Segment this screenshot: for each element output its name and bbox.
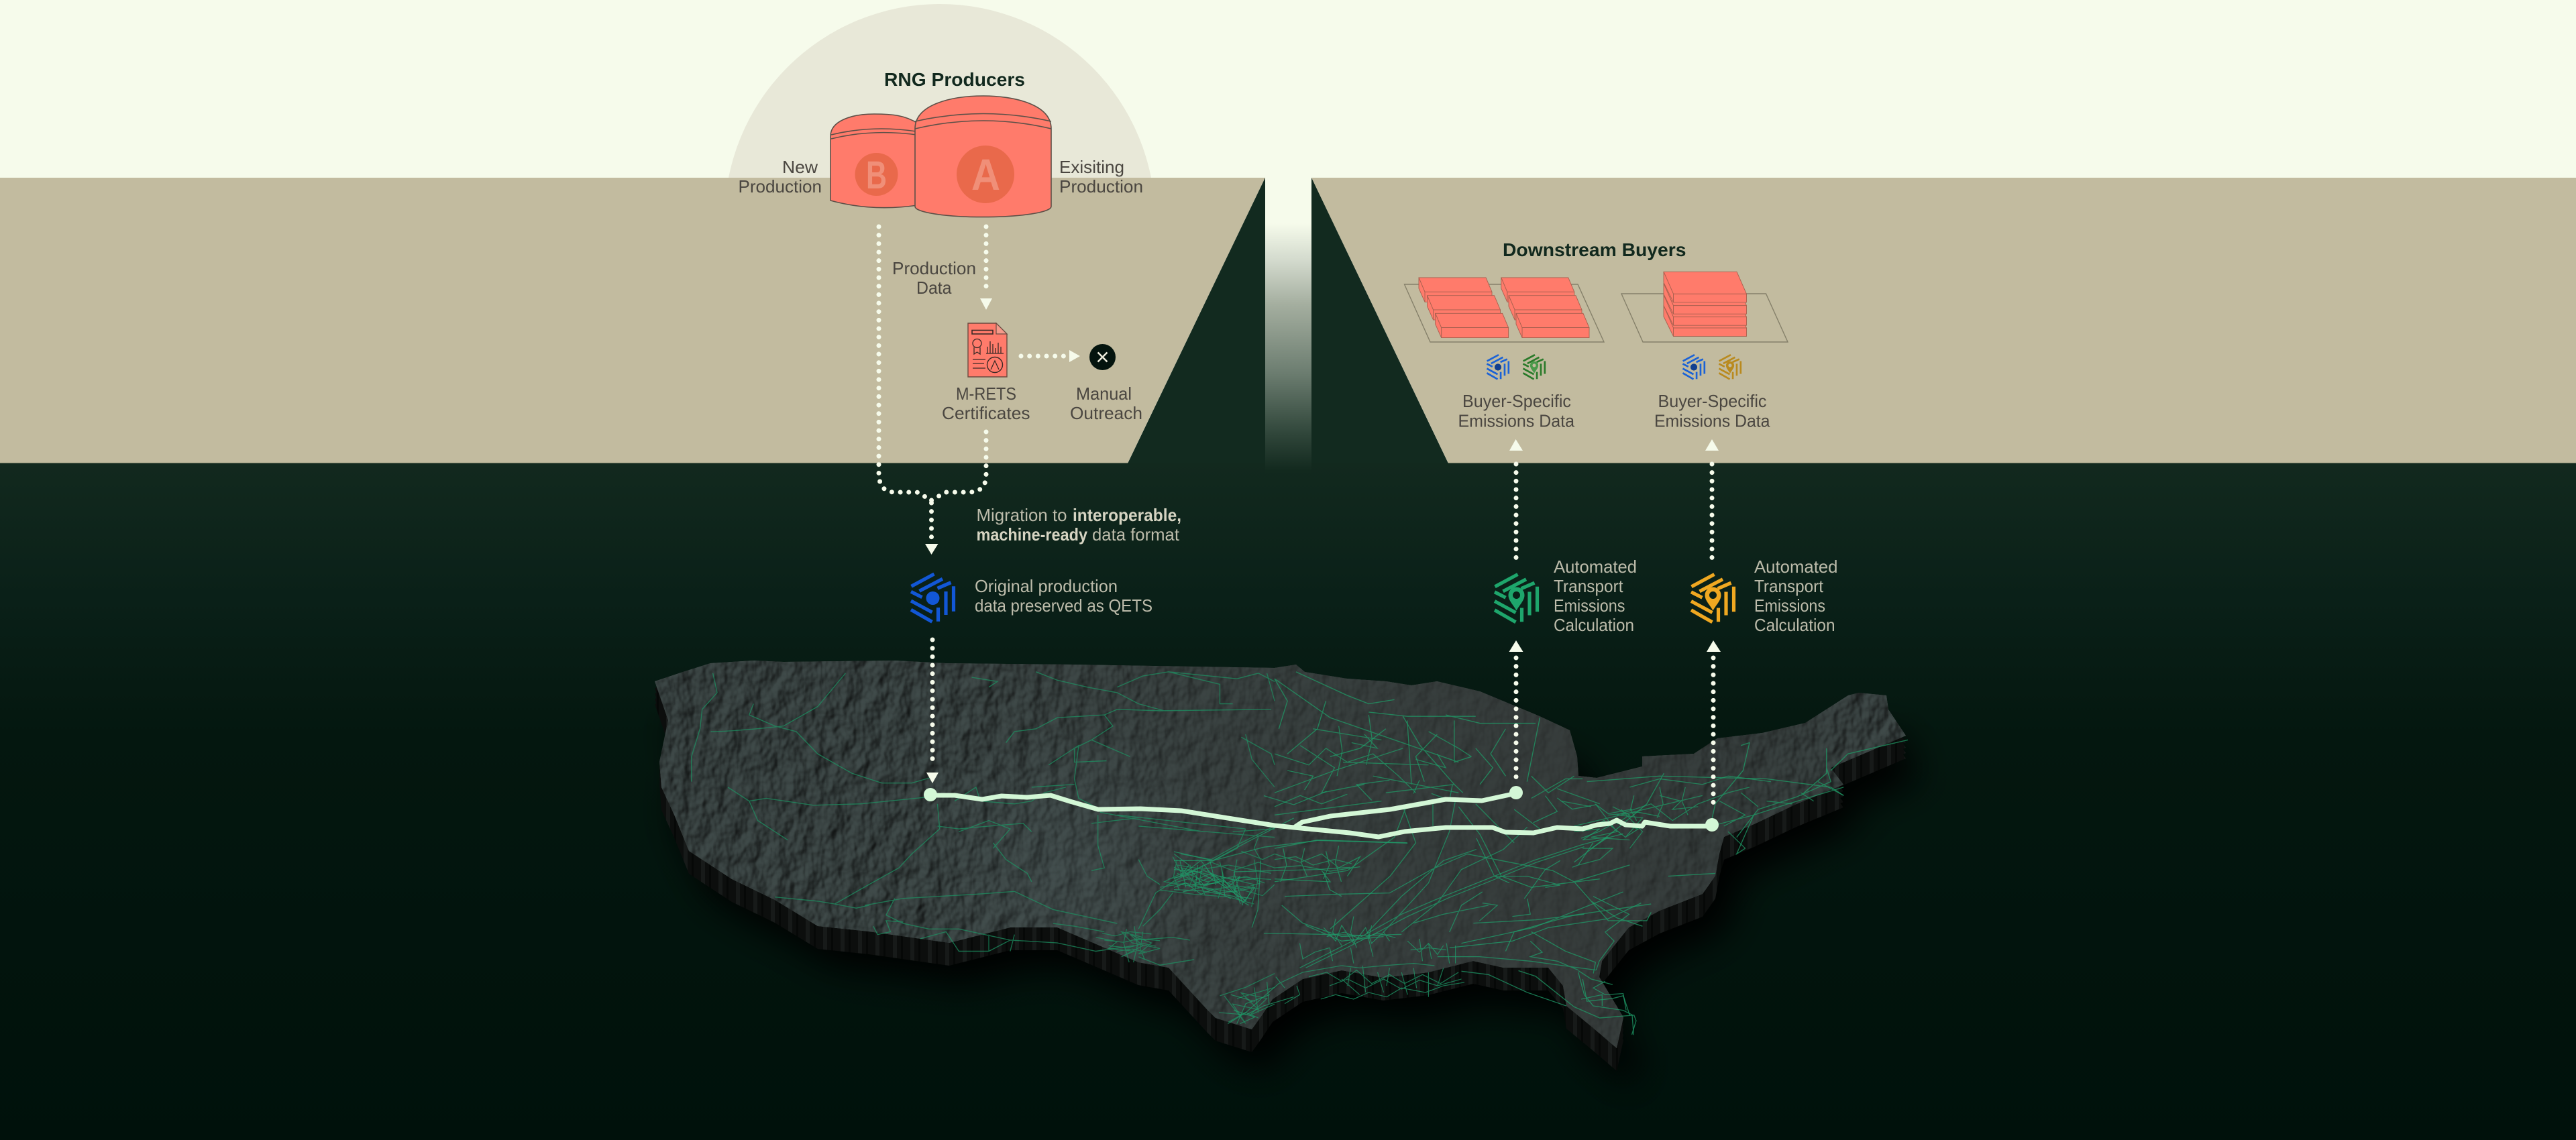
text: migration note (977, 505, 1181, 545)
pipeline cluster: Arkansas-Louisiana hub (1299, 917, 1456, 964)
heading: Downstream Buyers: Downstream Buyers (1503, 239, 1686, 260)
label: New Production (738, 157, 822, 196)
text: migration note: machine-ready (977, 524, 1087, 545)
icon: tank B new production: B (866, 154, 887, 197)
panel: right tan band (1311, 178, 2576, 463)
label: Buyer-Specific Emissions Data, left: Buyer-Specific (1462, 391, 1571, 411)
label: Existing Production: Production (1059, 176, 1143, 196)
label: M-RETS Certificates (942, 384, 1030, 423)
label: Production Data: Data (916, 278, 952, 298)
background: sky (0, 0, 2576, 469)
panel: left tan band (0, 178, 1265, 463)
arrow: pipeline node up to green cube (1509, 640, 1523, 779)
label: Buyer-Specific Emissions Data, right: Emissions Data (1654, 410, 1770, 431)
route line: shared trunk and lower branch (930, 795, 1712, 837)
buyer one: platform and building blocks (1405, 278, 1604, 342)
text: automated calculation, green (1554, 557, 1637, 635)
label: Production Data: Production (892, 258, 976, 278)
buyer two: platform and stacked blocks (1621, 272, 1788, 342)
arrow: migration to QETS (925, 503, 938, 555)
text: QETS note: Original production (975, 576, 1118, 596)
label: Existing Production: Exisiting (1059, 157, 1124, 177)
icon: small gold transport cube, buyer two (1719, 355, 1741, 380)
map shadow (672, 702, 1923, 1090)
map extruded sides (655, 667, 1906, 1071)
icon: tank B new production (830, 114, 918, 208)
pipeline cluster: Anadarko and north Texas (1160, 673, 1275, 907)
route line: upper branch (1294, 793, 1516, 828)
icon: blue QETS cube (911, 574, 954, 622)
arrow: QETS to pipeline origin (926, 640, 938, 783)
text: QETS note (975, 576, 1152, 616)
map terrain surface (644, 650, 1919, 1060)
central fading column (1265, 178, 1311, 473)
right dark wedge (1311, 178, 1448, 463)
left dark wedge (1128, 178, 1265, 463)
pipeline cluster: Appalachia and Mid-Atlantic (1561, 776, 1843, 865)
text: automated calculation, green: Transport (1554, 576, 1623, 596)
text: QETS note: data preserved as QETS (975, 595, 1152, 616)
icon: gold transport emissions cube (1691, 574, 1733, 622)
label: Existing Production (1059, 157, 1143, 196)
text: automated calculation, green: Automated (1554, 557, 1637, 577)
icon: manual outreach X (1089, 344, 1116, 370)
text: automated calculation, gold: Transport (1754, 576, 1824, 596)
icon: small blue QETS cube, buyer two (1682, 355, 1705, 380)
route node: buyer two (1705, 818, 1719, 832)
label: Buyer-Specific Emissions Data, right: Buyer-Specific (1658, 391, 1767, 411)
arrow: tank B dotted line to migration (879, 227, 931, 500)
text: migration note: Migration to (977, 505, 1067, 525)
text: migration note: interoperable, (1073, 505, 1181, 525)
icon: green transport emissions cube (1495, 574, 1538, 622)
heading: RNG Producers: RNG Producers (884, 69, 1025, 90)
label: New Production: Production (738, 176, 822, 196)
icon: M-RETS certificate document (968, 323, 1007, 377)
map: United States relief with pipelines (644, 650, 1923, 1090)
pipeline cluster: Permian basin (1095, 926, 1160, 962)
route: highlighted transport pipeline (924, 786, 1719, 837)
icon: tank A existing production (915, 96, 1051, 217)
arrow: certificates to manual outreach (1021, 350, 1080, 362)
text: automated calculation, gold: Calculation (1754, 615, 1835, 635)
label: Manual Outreach (1070, 384, 1142, 423)
arrow: certificates dotted line to migration (931, 432, 986, 500)
label: M-RETS Certificates: M-RETS (956, 384, 1016, 404)
text: migration note: data format (1092, 524, 1180, 545)
label: Buyer-Specific Emissions Data, right (1654, 391, 1770, 431)
producers dome (724, 4, 1155, 435)
text: automated calculation, green: Emissions (1554, 595, 1625, 616)
map pipeline network: west (692, 672, 1275, 1023)
map pipeline network: central and east (1275, 672, 1908, 1035)
arrow: pipeline node up to gold cube (1707, 640, 1721, 809)
label: New Production: New (782, 157, 818, 177)
arrow: tank A to certificates (980, 227, 992, 310)
pipeline cluster: south Texas (1220, 974, 1275, 1023)
pipeline cluster: Gulf offshore (1219, 964, 1464, 1024)
icon: tank A existing production: A (971, 150, 1000, 199)
text: automated calculation, gold: Emissions (1754, 595, 1825, 616)
label: M-RETS Certificates: Certificates (942, 403, 1030, 423)
label: Buyer-Specific Emissions Data, left (1458, 391, 1575, 431)
pipeline cluster: Oklahoma and Arkoma (1275, 846, 1360, 882)
map pipeline network: south-central and Gulf coast (1174, 780, 1641, 1035)
icon: small blue QETS cube, buyer one (1487, 355, 1509, 380)
pipeline cluster: Midwest grid (1275, 715, 1600, 843)
label: Production Data (892, 258, 976, 298)
icon: small green transport cube, buyer one (1523, 355, 1545, 380)
label: Manual Outreach: Outreach (1070, 403, 1142, 423)
background: dark ground (0, 463, 2576, 1140)
route node: buyer one (1509, 786, 1523, 799)
arrow: gold cube up to buyer two (1705, 439, 1719, 558)
text: automated calculation, green: Calculation (1554, 615, 1634, 635)
text: automated calculation, gold (1754, 557, 1838, 635)
route node: origin (924, 788, 937, 801)
label: Buyer-Specific Emissions Data, left: Emissions Data (1458, 410, 1575, 431)
arrow: green cube up to buyer one (1509, 439, 1523, 558)
label: Manual Outreach: Manual (1076, 384, 1132, 404)
pipeline cluster: Oklahoma hub (1174, 854, 1258, 905)
text: automated calculation, gold: Automated (1754, 557, 1838, 577)
